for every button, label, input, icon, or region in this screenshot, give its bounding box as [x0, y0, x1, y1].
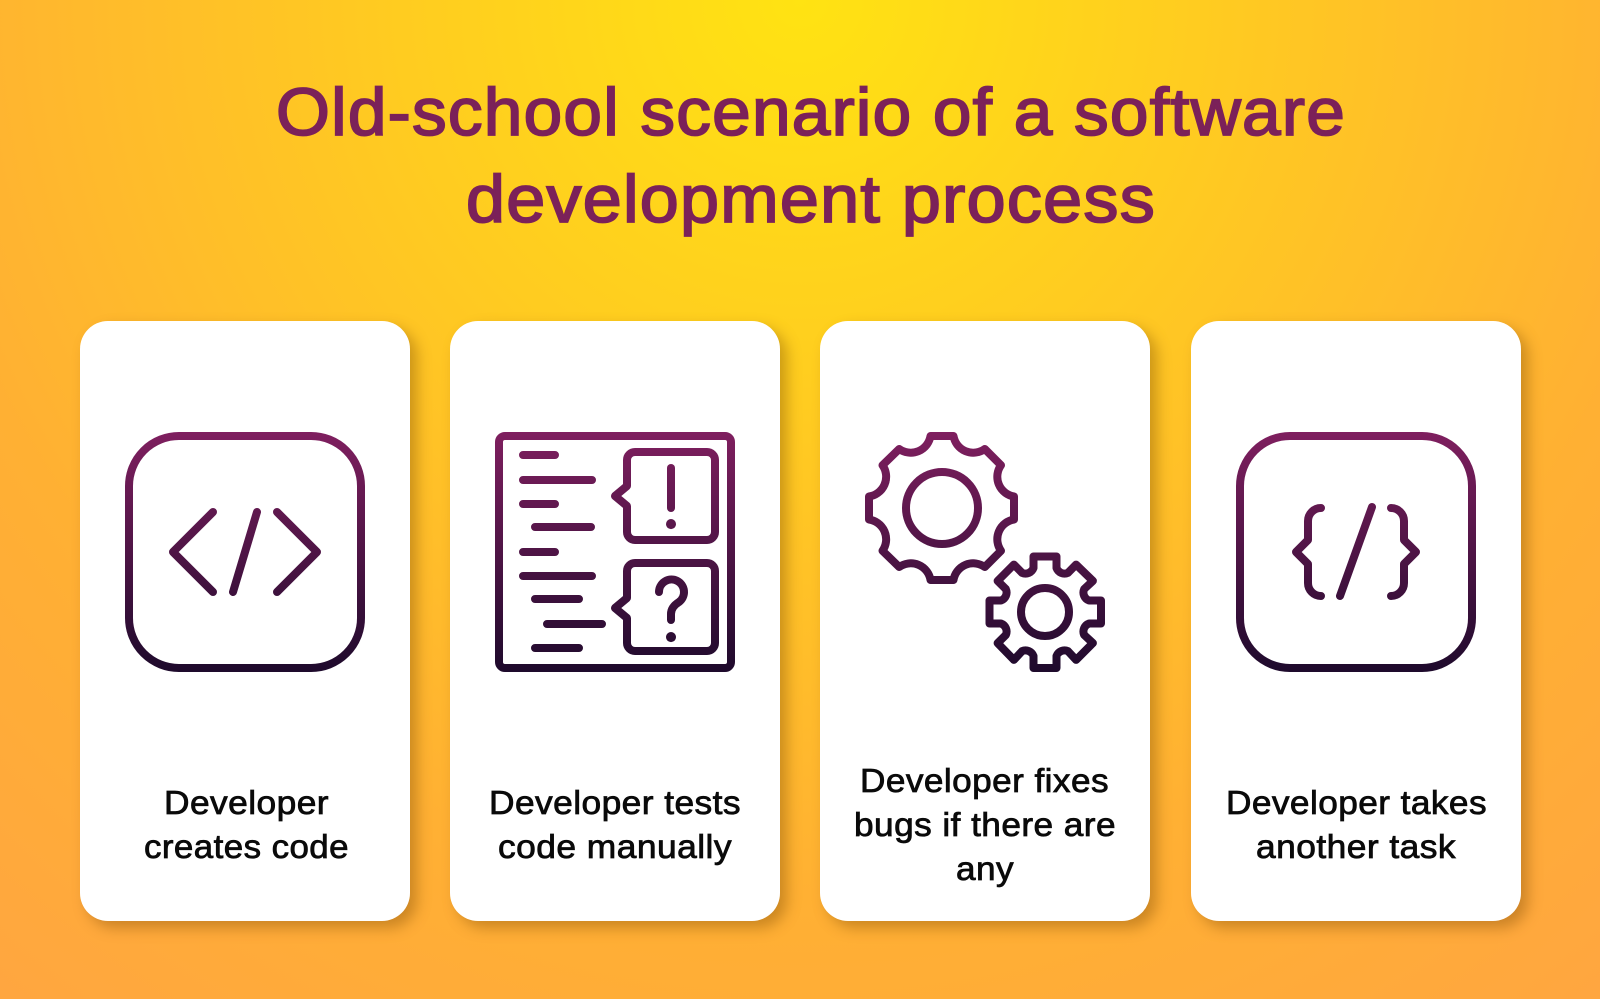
text: developer creates code: creates code: [144, 828, 349, 865]
text: developer fixes bugs if there are any: Developer fixes: [860, 762, 1109, 799]
panel: developer creates code: [80, 321, 410, 921]
text: developer takes another task: Developer takes: [1226, 784, 1487, 821]
text: developer creates code: [144, 784, 349, 865]
panel: developer takes another task: [1191, 321, 1521, 921]
icon: curly braces window: [1240, 436, 1472, 668]
text: developer creates code: Developer: [164, 784, 329, 821]
icon: code tag window: [129, 436, 361, 668]
panel: developer tests code manually: [450, 321, 780, 921]
text: developer takes another task: [1226, 784, 1487, 865]
text: developer takes another task: another task: [1256, 828, 1456, 865]
text: developer tests code manually: code manually: [498, 828, 732, 865]
text: developer tests code manually: [489, 784, 741, 865]
text: developer fixes bugs if there are any: bugs if there are: [854, 806, 1116, 843]
text: developer fixes bugs if there are any: [854, 762, 1116, 887]
text: developer tests code manually: Developer tests: [489, 784, 741, 821]
panel: developer fixes bugs: [820, 321, 1150, 921]
title: development process: [466, 162, 1156, 237]
icon: two gears: [869, 436, 1101, 668]
icon: code listing with comment bubbles: [499, 436, 731, 668]
title: [276, 75, 1346, 237]
title: Old-school scenario of a software: [276, 75, 1346, 150]
text: developer fixes bugs if there are any: any: [956, 850, 1014, 887]
